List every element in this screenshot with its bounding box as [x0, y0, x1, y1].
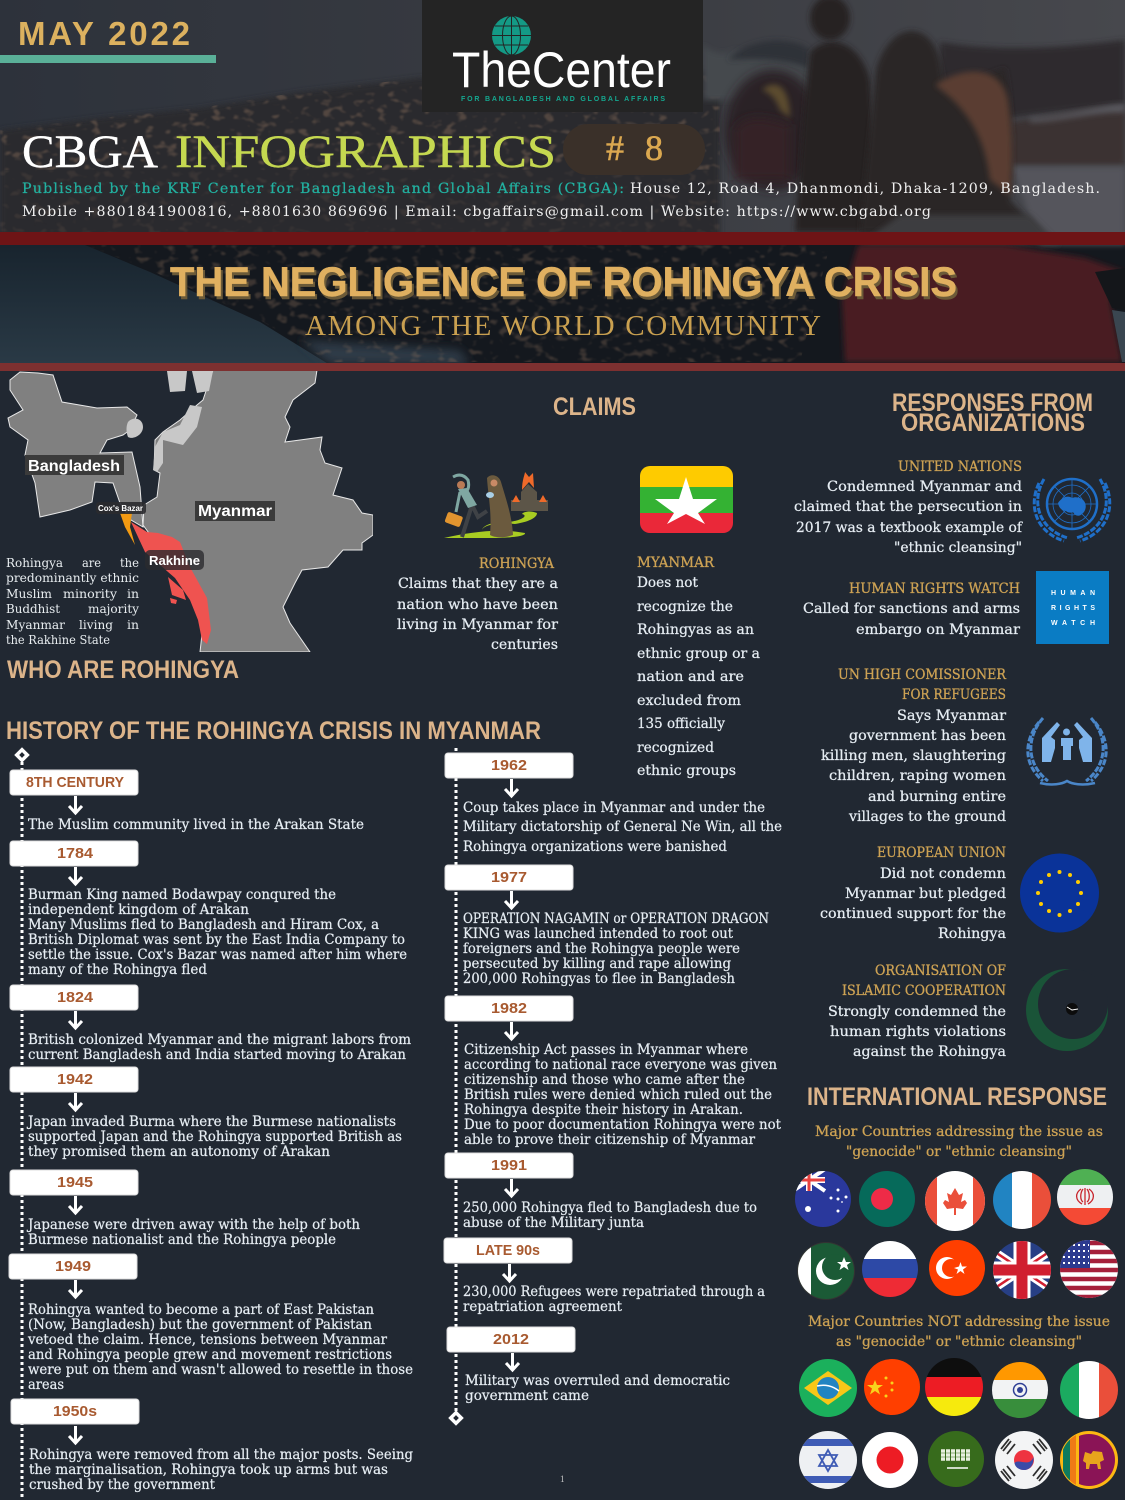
- flag: Brazil: [798, 1358, 858, 1418]
- entry: 1824: British colonized Myanmar and the migrant labors from: [28, 1032, 411, 1048]
- text: countries not addressing the issue: as "genocide" or "ethnic cleansing": [836, 1334, 1082, 1350]
- entry: 2012: [447, 1327, 730, 1404]
- text: who are the Rohingya: Muslim: [6, 587, 53, 601]
- flag: Turkey: [929, 1240, 985, 1296]
- entry: 1962: Coup takes place in Myanmar and under the: [463, 800, 765, 816]
- title: CBGA Infographics: INFOGRAPHICS: [175, 126, 556, 178]
- flag: France: [992, 1170, 1052, 1230]
- panel: Human Rights Watch: Called for sanctions and arms: [803, 601, 1020, 617]
- flag: Sri Lanka: [1060, 1431, 1118, 1489]
- map label: Bangladesh: Bangladesh: [28, 458, 120, 475]
- panel: Organisation of Islamic Cooperation: human rights violations: [830, 1024, 1006, 1040]
- panel: Myanmar claim: nation and are: [637, 669, 744, 685]
- entry: 1950s: 1950s: [53, 1403, 97, 1420]
- entry: 1784: many of the Rohingya fled: [28, 962, 207, 978]
- entry: 1950s: crushed by the government: [29, 1477, 216, 1493]
- map label: Rakhine: [145, 550, 204, 570]
- map: Cox's Bazar area: [120, 513, 135, 545]
- icon: OIC crescent: [1026, 969, 1108, 1051]
- map label: Myanmar: Myanmar: [198, 503, 272, 520]
- entry: 1945: 1945: [57, 1174, 93, 1191]
- entry: 1991: 250,000 Rohingya fled to Bangladesh due to: [463, 1200, 757, 1216]
- panel: UN High Commissioner for Refugees: and burning entire: [868, 789, 1006, 805]
- entry: 8th century: [10, 770, 364, 833]
- panel: United Nations: [794, 459, 1110, 556]
- text: who are the Rohingya: Myanmar: [6, 618, 65, 632]
- text: countries addressing the issue: [815, 1124, 1103, 1160]
- text: countries addressing the issue: Major Countries addressing the issue as: [815, 1124, 1103, 1140]
- flag: Japan: [862, 1432, 918, 1488]
- flag: Australia: [795, 1171, 851, 1227]
- panel: Organisation of Islamic Cooperation: [828, 963, 1108, 1060]
- publisher details: House 12, Road 4, Dhanmondi, Dhaka-1209, Bangladesh.: [630, 181, 1100, 197]
- entry: 1991: [445, 1153, 757, 1231]
- issue number badge: # 8: [606, 128, 663, 168]
- panel: UN High Commissioner for Refugees: UN HIGH COMISSIONER: [838, 667, 1007, 683]
- entry: 1977: 1977: [491, 869, 527, 886]
- entry: 1949: were put on them and wasn't allowed to resettle in those: [28, 1362, 413, 1378]
- panel: Organisation of Islamic Cooperation: against the Rohingya: [853, 1044, 1006, 1060]
- panel: Rohingya claim: [397, 472, 558, 653]
- flag: Saudi Arabia: [928, 1431, 984, 1487]
- logo: TheCenter: FOR BANGLADESH AND GLOBAL AFFAIRS: [461, 96, 665, 103]
- panel: Myanmar claim: ethnic groups: [637, 763, 736, 779]
- panel: UN High Commissioner for Refugees: villages to the ground: [848, 809, 1006, 825]
- panel: UN High Commissioner for Refugees: killing men, slaughtering: [821, 748, 1006, 764]
- icon: HRW logo: WATCH: [1051, 620, 1095, 627]
- entry: 1977: 200,000 Rohingyas to flee in Bangladesh: [463, 971, 735, 987]
- panel: UN High Commissioner for Refugees: children, raping women: [829, 768, 1006, 784]
- heading: who are Rohingya: WHO ARE ROHINGYA: [7, 656, 239, 684]
- timeline spine left: [20, 750, 24, 1500]
- text: who are the Rohingya: minority: [63, 587, 117, 601]
- entry: 1784: British Diplomat was sent by the East India Company to: [28, 932, 405, 948]
- entry: 8th century: 8TH CENTURY: [26, 774, 124, 791]
- panel: Organisation of Islamic Cooperation: ISLAMIC COOPERATION: [842, 983, 1006, 999]
- entry: late 90s: 230,000 Refugees were repatriated through a: [463, 1284, 765, 1300]
- map: light regions: [126, 371, 213, 472]
- entry: 1824: [10, 985, 411, 1063]
- panel: Rohingya claim: living in Myanmar for: [397, 617, 558, 633]
- panel: European Union: Rohingya: [938, 926, 1006, 942]
- main title: THE NEGLIGENCE OF ROHINGYA CRISIS: [170, 258, 957, 305]
- timeline: left column: [9, 747, 413, 1500]
- flags: countries not addressing the issue: [798, 1357, 1119, 1490]
- entry: 1784: independent kingdom of Arakan: [28, 902, 249, 918]
- panel: UN High Commissioner for Refugees: FOR REFUGEES: [902, 687, 1006, 703]
- flag: Italy: [1059, 1360, 1119, 1420]
- entry: 1942: Japan invaded Burma where the Burmese nationalists: [26, 1114, 396, 1130]
- panel: European Union: Did not condemn: [880, 866, 1006, 882]
- publisher details: Mobile +8801841900816, +8801630 869696 | Email: cbgaffairs@gmail.com | Website: https://www.cbgabd.org: [22, 204, 931, 220]
- panel: Rohingya claim: nation who have been: [397, 597, 558, 613]
- entry: 1942: 1942: [57, 1071, 93, 1088]
- panel: European Union: Myanmar but pledged: [845, 886, 1006, 902]
- entry: 1991: 1991: [491, 1157, 527, 1174]
- panel: Rohingya claim: Claims that they are a: [398, 576, 558, 592]
- flag: Canada: [925, 1171, 985, 1231]
- entry: 1949: 1949: [55, 1258, 91, 1275]
- text: who are the Rohingya: living: [79, 618, 113, 632]
- icon: EU flag: [1020, 854, 1099, 932]
- panel: United Nations: 2017 was a textbook example of: [796, 520, 1024, 536]
- text: who are the Rohingya: [6, 556, 139, 647]
- flag: India: [992, 1362, 1048, 1418]
- entry: 1949: [9, 1254, 413, 1393]
- entry: 1949: areas: [28, 1377, 64, 1393]
- entry: 1977: OPERATION NAGAMIN or OPERATION DRAGON: [463, 911, 769, 927]
- panel: United Nations: claimed that the persecution in: [794, 499, 1022, 515]
- entry: 1949: (Now, Bangladesh) but the government of Pakistan: [28, 1317, 372, 1333]
- entry: 1982: Due to poor documentation Rohingya were not: [464, 1117, 782, 1133]
- illustration: fleeing refugees and burning house: [444, 472, 548, 538]
- panel: Rohingya claim: centuries: [491, 637, 558, 653]
- panel: European Union: EUROPEAN UNION: [877, 845, 1006, 861]
- entry: 1982: citizenship and those who came after the: [464, 1072, 745, 1088]
- panel: Organisation of Islamic Cooperation: ORGANISATION OF: [875, 963, 1006, 979]
- flag: South Korea: [995, 1431, 1053, 1489]
- icon: HRW logo: HUMAN: [1051, 590, 1095, 597]
- text: who are the Rohingya: Rohingya: [6, 556, 63, 570]
- panel: European Union: [820, 845, 1099, 942]
- text: who are the Rohingya: Buddhist: [6, 602, 60, 616]
- teal accent bar: [0, 55, 216, 63]
- text: countries not addressing the issue: [808, 1314, 1110, 1350]
- panel: Myanmar claim: Does not: [637, 575, 698, 591]
- map label: Rakhine: Rakhine: [149, 553, 200, 568]
- flag: Bangladesh: [859, 1171, 915, 1227]
- entry: 1945: Burmese nationalist and the Rohingya people: [28, 1232, 336, 1248]
- heading: history: HISTORY OF THE ROHINGYA CRISIS IN MYANMAR: [6, 717, 541, 745]
- panel: Rohingya claim: ROHINGYA: [479, 556, 554, 572]
- panel: Myanmar claim: recognize the: [637, 599, 733, 615]
- entry: 1942: they promised them an autonomy of Arakan: [28, 1144, 330, 1160]
- panel: United Nations: UNITED NATIONS: [898, 459, 1022, 475]
- panel: Myanmar claim: excluded from: [637, 693, 741, 709]
- entry: 1982: [445, 996, 782, 1148]
- entry: 2012: 2012: [493, 1331, 529, 1348]
- entry: 1824: current Bangladesh and India started moving to Arakan: [28, 1047, 406, 1063]
- logo: TheCenter: [422, 0, 703, 112]
- entry: 1977: KING was launched intended to root out: [463, 926, 734, 942]
- timeline end marker: [448, 1410, 464, 1426]
- timeline spine right: [454, 748, 458, 1412]
- flag: Pakistan: [796, 1241, 856, 1301]
- heading: claims: CLAIMS: [553, 393, 636, 421]
- flag: Iran: [1057, 1169, 1113, 1225]
- entry: 1950s: Rohingya were removed from all the major posts. Seeing: [29, 1447, 413, 1463]
- red band: [0, 232, 1125, 245]
- entry: 1945: [10, 1170, 360, 1248]
- entry: 1784: [10, 841, 407, 978]
- heading: responses from organizations: RESPONSES FROM: [892, 389, 1093, 417]
- page number: 1: [560, 1474, 564, 1484]
- entry: 1977: [445, 865, 769, 987]
- red band lower: [0, 363, 1125, 371]
- panel: Myanmar claim: Rohingyas as an: [637, 622, 754, 638]
- text: who are the Rohingya: are: [82, 556, 101, 570]
- icon: HRW logo: RIGHTS: [1051, 605, 1095, 612]
- entry: 1945: Japanese were driven away with the help of both: [26, 1217, 360, 1233]
- timeline start marker: [14, 747, 30, 763]
- entry: 1784: Burman King named Bodawpay conqured the: [28, 887, 336, 903]
- text: who are the Rohingya: majority: [88, 602, 139, 616]
- header photo background: [0, 0, 1125, 365]
- map: Rakhine state: [131, 522, 211, 644]
- entry: 2012: Military was overruled and democratic: [465, 1373, 730, 1389]
- icon: UN emblem: [1034, 479, 1110, 541]
- entry: 1824: 1824: [57, 989, 94, 1006]
- panel: UN High Commissioner for Refugees: [821, 667, 1106, 825]
- entry: 1950s: [11, 1399, 413, 1493]
- entry: late 90s: [444, 1238, 765, 1315]
- title: CBGA Infographics: CBGA: [22, 126, 158, 178]
- flag: Germany: [924, 1357, 984, 1417]
- entry: 1982: British rules were denied which ruled out the: [464, 1087, 772, 1103]
- entry: 1942: supported Japan and the Rohingya supported British as: [28, 1129, 402, 1145]
- panel: European Union: continued support for the: [820, 906, 1006, 922]
- entry: late 90s: LATE 90s: [476, 1242, 540, 1259]
- map: Bangladesh, Myanmar and Rakhine: [8, 370, 373, 652]
- map land: Bangladesh: [8, 372, 143, 527]
- panel: Organisation of Islamic Cooperation: Strongly condemned the: [828, 1004, 1006, 1020]
- panel: Human Rights Watch: HUMAN RIGHTS WATCH: [849, 581, 1020, 597]
- text: who are the Rohingya: the: [120, 556, 139, 570]
- entry: 1962: [445, 753, 782, 855]
- entry: 1982: 1982: [491, 1000, 527, 1017]
- panel: Myanmar claim: MYANMAR: [637, 555, 715, 571]
- icon: UNHCR emblem: [1028, 718, 1106, 784]
- map land: Myanmar: [143, 370, 373, 652]
- entry: 1977: persecuted by killing and rape allowing: [463, 956, 731, 972]
- entry: 1977: foreigners and the Rohingya people were: [463, 941, 740, 957]
- heading: responses from organizations: [892, 389, 1093, 437]
- entry: 1784: 1784: [57, 845, 94, 862]
- panel: Myanmar claim: ethnic group or a: [637, 646, 760, 662]
- entry: 1942: [10, 1067, 402, 1160]
- entry: 1962: 1962: [491, 757, 527, 774]
- panel: UN High Commissioner for Refugees: government has been: [849, 728, 1006, 744]
- title: CBGA Infographics: [22, 126, 556, 178]
- entry: 1949: Rohingya wanted to become a part of East Pakistan: [28, 1302, 374, 1318]
- flag: Russia: [862, 1241, 918, 1297]
- text: who are the Rohingya: in: [127, 618, 139, 632]
- entry: 1950s: the marginalisation, Rohingya took up arms but was: [29, 1462, 388, 1478]
- icon: Myanmar flag: [640, 466, 733, 533]
- timeline: right column: [444, 748, 782, 1426]
- map label: Cox's Bazar: Cox's Bazar: [98, 504, 143, 513]
- panel: Myanmar claim: recognized: [637, 740, 714, 756]
- icon: HRW logo: [1036, 571, 1109, 644]
- panel: Myanmar claim: [637, 466, 760, 779]
- entry: 1784: Many Muslims fled to Bangladesh and Hiram Cox, a: [28, 917, 379, 933]
- publisher details: Published by the KRF Center for Bangladesh and Global Affairs (CBGA):: [22, 181, 624, 197]
- panel: United Nations: "ethnic cleansing": [894, 540, 1022, 556]
- flag: United Kingdom: [992, 1240, 1052, 1300]
- subtitle: AMONG THE WORLD COMMUNITY: [305, 310, 821, 342]
- flag: China: [864, 1359, 920, 1415]
- entry: 1982: able to prove their citizenship of Myanmar: [464, 1132, 755, 1148]
- heading: responses from organizations: ORGANIZATIONS: [901, 409, 1085, 437]
- issue number badge: [563, 124, 705, 175]
- publisher details: [22, 181, 1100, 220]
- panel: UN High Commissioner for Refugees: Says Myanmar: [897, 708, 1006, 724]
- flag: United States: [1059, 1239, 1119, 1299]
- entry: 1982: according to national race everyone was given: [464, 1057, 777, 1073]
- entry: 1949: vetoed the claim. Hence, tensions between Myanmar: [27, 1332, 387, 1348]
- flags: countries addressing the issue: [793, 1167, 1119, 1301]
- text: who are the Rohingya: predominantly ethnic: [6, 571, 139, 585]
- panel: Human Rights Watch: embargo on Myanmar: [856, 622, 1020, 638]
- panel: Myanmar claim: 135 officially: [637, 716, 725, 732]
- flag: Israel: [798, 1430, 858, 1490]
- entry: 1982: Rohingya despite their history in Arakan.: [464, 1102, 743, 1118]
- text: who are the Rohingya: in: [127, 587, 139, 601]
- date: May 2022: MAY 2022: [18, 15, 190, 52]
- entry: 1991: abuse of the Military junta: [463, 1215, 644, 1231]
- panel: United Nations: Condemned Myanmar and: [827, 479, 1022, 495]
- text: countries addressing the issue: "genocide" or "ethnic cleansing": [846, 1144, 1072, 1160]
- logo: TheCenter: TheCenter: [452, 42, 671, 98]
- entry: 1962: Military dictatorship of General Ne Win, all the: [463, 819, 782, 835]
- entry: 1982: Citizenship Act passes in Myanmar where: [464, 1042, 748, 1058]
- entry: 1962: Rohingya organizations were banished: [463, 839, 727, 855]
- text: countries not addressing the issue: Major Countries NOT addressing the issue: [808, 1314, 1110, 1330]
- panel: Human Rights Watch: [803, 571, 1109, 644]
- entry: 1949: and Rohingya people grew and movement restrictions: [28, 1347, 392, 1363]
- map label: Cox's Bazar: [96, 502, 146, 514]
- text: who are the Rohingya: the Rakhine State: [6, 633, 110, 647]
- entry: 1784: settle the issue. Cox's Bazar was named after him where: [28, 947, 407, 963]
- entry: 2012: government came: [465, 1388, 589, 1404]
- entry: late 90s: repatriation agreement: [463, 1299, 623, 1315]
- entry: 8th century: The Muslim community lived in the Arakan State: [28, 817, 364, 833]
